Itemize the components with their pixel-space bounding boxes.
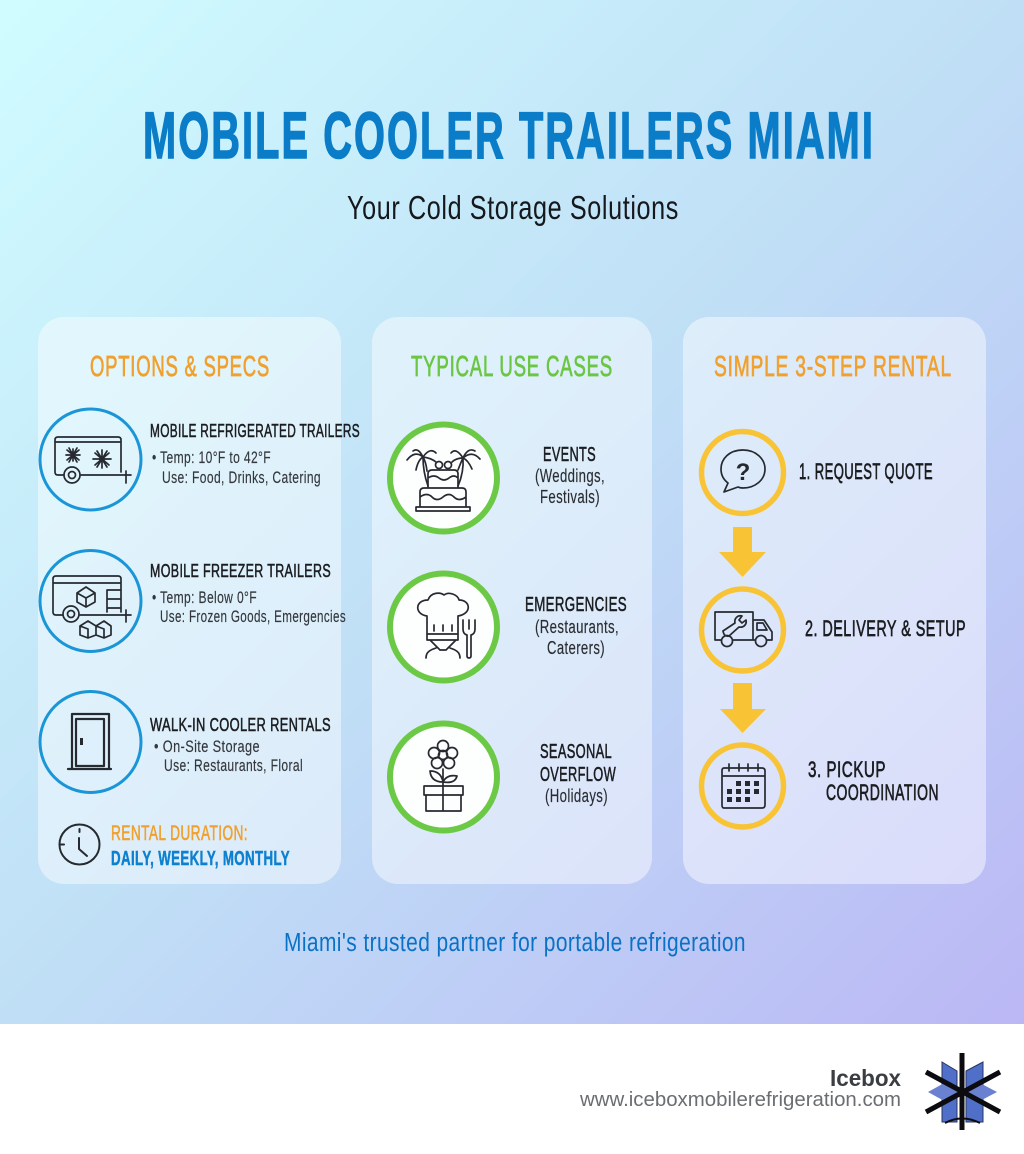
text: step 3: 3. PICKUP — [808, 757, 886, 782]
subtitle: Your Cold Storage Solutions — [347, 189, 679, 226]
text: events: EVENTS — [543, 444, 596, 466]
text: events: Festivals) — [540, 487, 600, 507]
icon: request quote — [702, 432, 784, 514]
arrow: step 1 to 2 — [719, 527, 766, 577]
icon: calendar — [702, 745, 784, 827]
text: mobile refrigerated trailers: • Temp: 10°F to 42°F — [152, 449, 271, 467]
text: mobile refrigerated trailers: MOBILE REFRIGERATED TRAILERS — [150, 420, 360, 441]
footer — [0, 1024, 1024, 1154]
text: emergencies — [525, 594, 627, 658]
text: rental duration: RENTAL DURATION: — [111, 822, 248, 845]
icon: freezer trailer — [40, 550, 141, 652]
icon: walk-in cooler door — [40, 692, 141, 792]
panel: typical use cases — [372, 317, 652, 884]
text: emergencies: Caterers) — [547, 638, 605, 658]
text: step 3 — [808, 757, 939, 805]
icon: events cake — [390, 424, 497, 532]
text: events — [535, 444, 605, 507]
text: seasonal overflow — [540, 741, 616, 806]
text: rental duration: DAILY, WEEKLY, MONTHLY — [111, 847, 290, 870]
text: mobile freezer trailers: MOBILE FREEZER TRAILERS — [150, 560, 331, 581]
heading: typical use cases: TYPICAL USE CASES — [411, 351, 613, 383]
text: walk-in cooler rentals: Use: Restaurants, Floral — [164, 757, 303, 775]
arrow: step 2 to 3 — [720, 683, 766, 733]
icon: refrigerated trailer — [40, 409, 141, 510]
text: mobile refrigerated trailers: Use: Food, Drinks, Catering — [162, 469, 321, 487]
text: seasonal overflow: (Holidays) — [545, 786, 608, 806]
text: seasonal overflow: SEASONAL — [540, 741, 612, 763]
footer brand name: Icebox — [830, 1065, 901, 1091]
heading: options and specs: OPTIONS & SPECS — [90, 351, 270, 383]
text: emergencies: EMERGENCIES — [525, 594, 627, 616]
text: events: (Weddings, — [535, 466, 605, 486]
text: step 1: 1. REQUEST QUOTE — [799, 459, 933, 484]
panel: simple 3-step rental — [683, 317, 986, 884]
text: mobile freezer trailers — [150, 560, 346, 626]
text: seasonal overflow: OVERFLOW — [540, 764, 616, 786]
icon: delivery truck — [702, 589, 784, 671]
icon: seasonal flower — [390, 724, 497, 830]
text: walk-in cooler rentals: • On-Site Storage — [154, 738, 260, 756]
text: walk-in cooler rentals — [150, 714, 331, 775]
icon: clock — [60, 824, 100, 864]
icon: request quote: ? — [736, 459, 750, 486]
footer url: www.iceboxmobilerefrigeration.com — [579, 1089, 901, 1111]
text: step 3: COORDINATION — [826, 780, 939, 805]
logo: icebox snowflake — [926, 1053, 1000, 1130]
text: mobile freezer trailers: • Temp: Below 0°F — [152, 589, 257, 607]
text: rental duration — [111, 822, 290, 870]
tagline: Miami's trusted partner for portable refrigeration — [284, 929, 746, 957]
text: mobile freezer trailers: Use: Frozen Goods, Emergencies — [160, 608, 346, 626]
icon: emergencies chef — [390, 574, 497, 680]
text: mobile refrigerated trailers — [150, 420, 360, 487]
text: walk-in cooler rentals: WALK-IN COOLER RENTALS — [150, 714, 331, 735]
panel: options and specs — [38, 317, 360, 884]
text: emergencies: (Restaurants, — [535, 617, 619, 637]
